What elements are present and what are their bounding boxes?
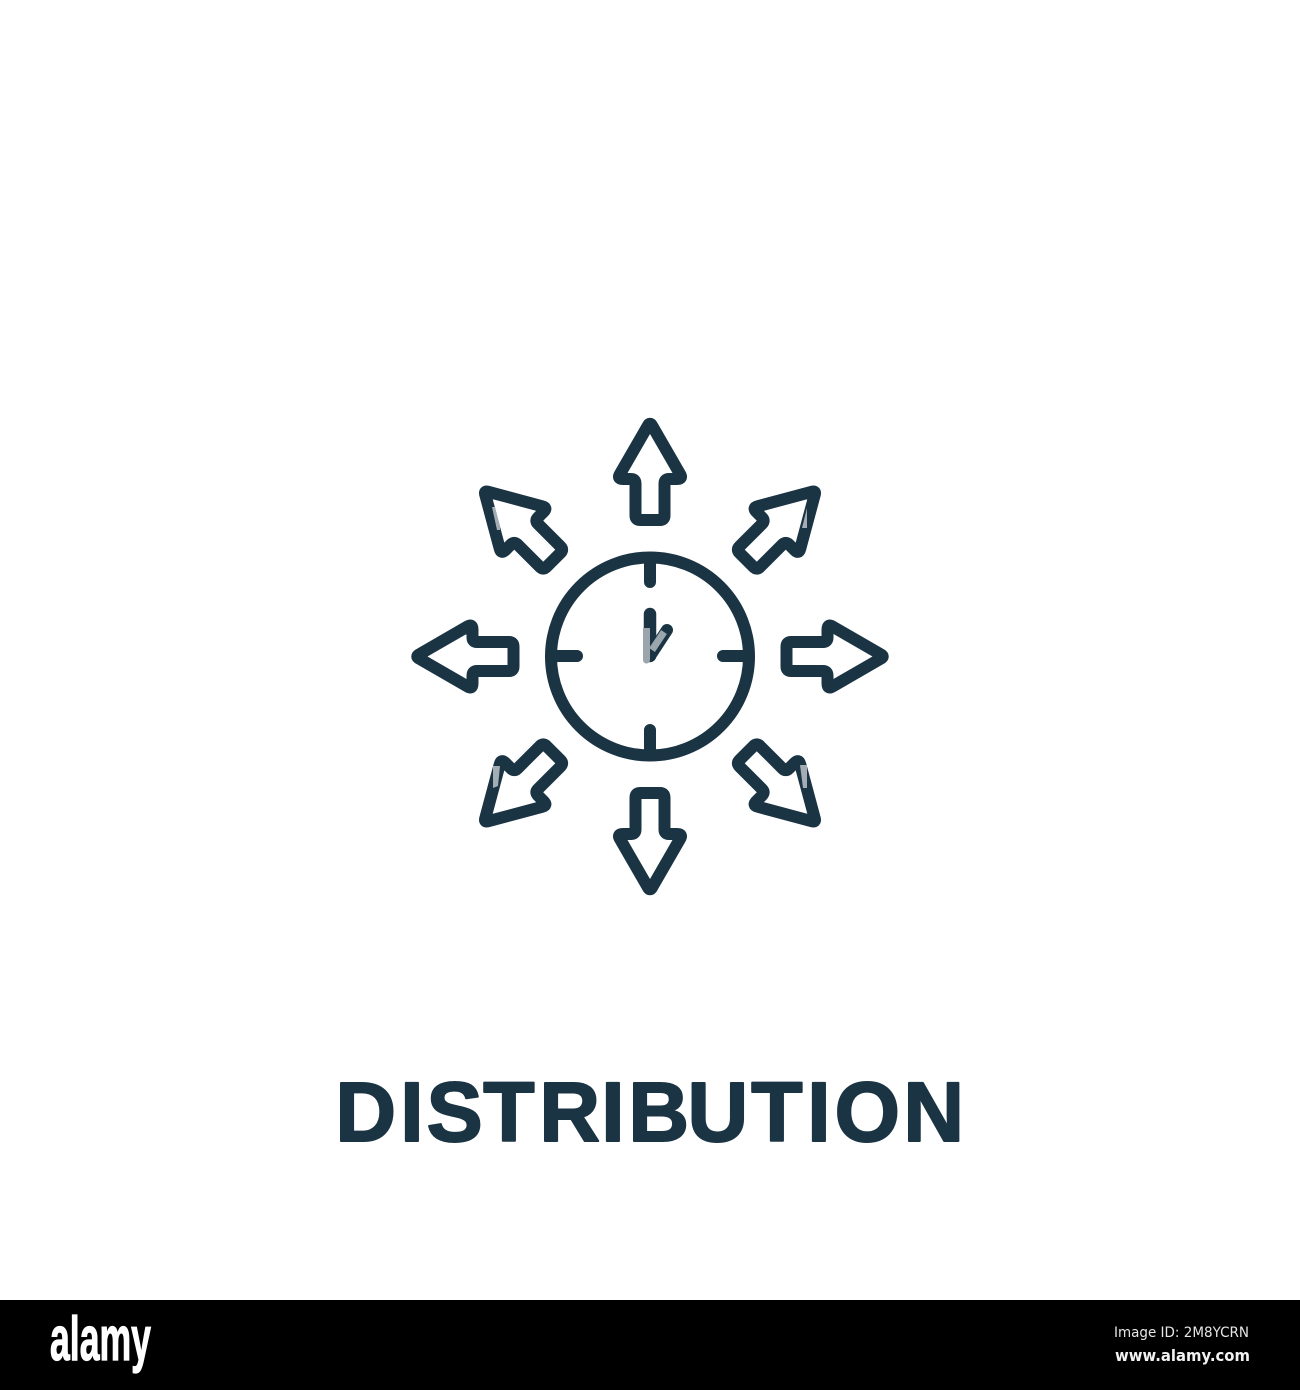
icon: clock face [551,558,749,756]
website: www.alamy.com [1115,1346,1250,1365]
watermark fragments over arrows [492,507,807,788]
image id: Image ID: 2M8YCRN [1114,1325,1249,1341]
arrow: down-right [725,731,836,843]
arrow: up [619,424,681,520]
arrow: down-left [464,731,575,843]
icon: clock with radiating arrows [417,424,883,889]
arrow: up-left [464,470,575,582]
arrow: down [619,793,681,889]
logo: alamy: alamy [50,1305,151,1374]
arrow: left [417,626,514,688]
footer band [0,1300,1300,1390]
arrow: right [786,626,883,688]
icon: clock hands [646,614,667,660]
title: DISTRIBUTION [335,1065,964,1159]
arrow: up-right [725,470,836,582]
